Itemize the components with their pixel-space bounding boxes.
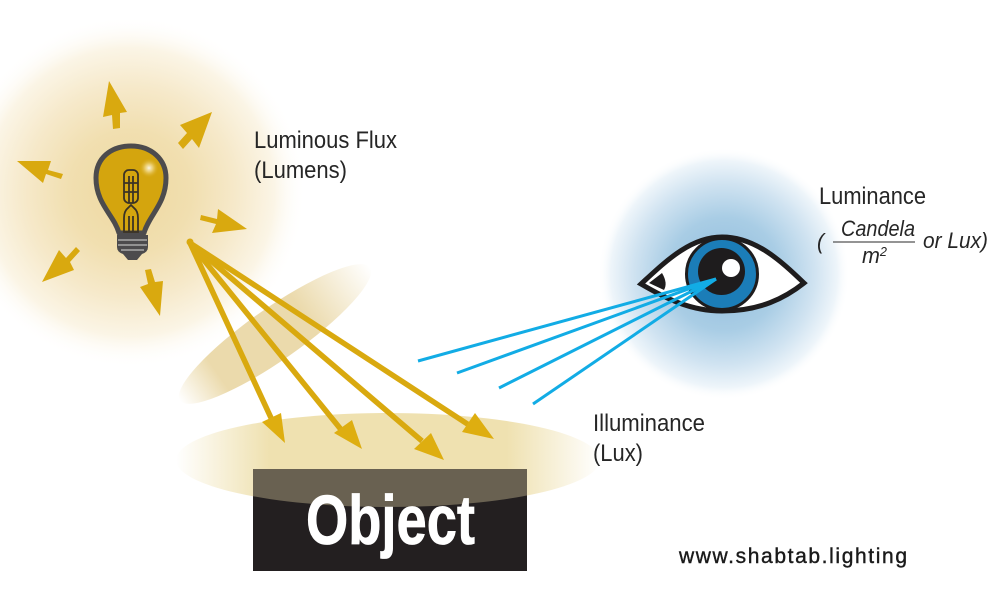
- label: luminance: Luminance: [819, 183, 926, 210]
- light rays to object: [190, 243, 472, 441]
- label: luminance: 2: [879, 244, 888, 259]
- icon: eye: [641, 237, 804, 311]
- tilted light ellipse: [165, 246, 385, 422]
- radiating arrows: [17, 81, 247, 316]
- label: illuminance: [593, 410, 705, 467]
- glow: light source halo: [0, 16, 306, 368]
- filament capsule: [124, 170, 138, 232]
- glow: eye halo: [598, 148, 850, 400]
- label: luminance: or Lux): [923, 228, 988, 253]
- object label: Object: [306, 481, 475, 559]
- label: illuminance: (Lux): [593, 440, 643, 467]
- label: luminous flux: Luminous Flux: [254, 127, 397, 154]
- label: illuminance: Illuminance: [593, 410, 705, 437]
- label: luminance: m: [862, 243, 880, 268]
- label: luminance: [817, 183, 988, 268]
- website url: www.shabtab.lighting: [678, 545, 907, 568]
- object box: [253, 469, 527, 571]
- label: luminance: (: [817, 229, 827, 254]
- illuminated ellipse on object: [176, 413, 600, 507]
- label: luminous flux: (Lumens): [254, 157, 347, 184]
- label: luminance: Candela: [841, 216, 915, 241]
- ray arrowheads: [262, 413, 494, 460]
- blue sight lines: [418, 279, 716, 404]
- label: luminous flux: [254, 127, 397, 184]
- icon: light bulb: [96, 146, 166, 260]
